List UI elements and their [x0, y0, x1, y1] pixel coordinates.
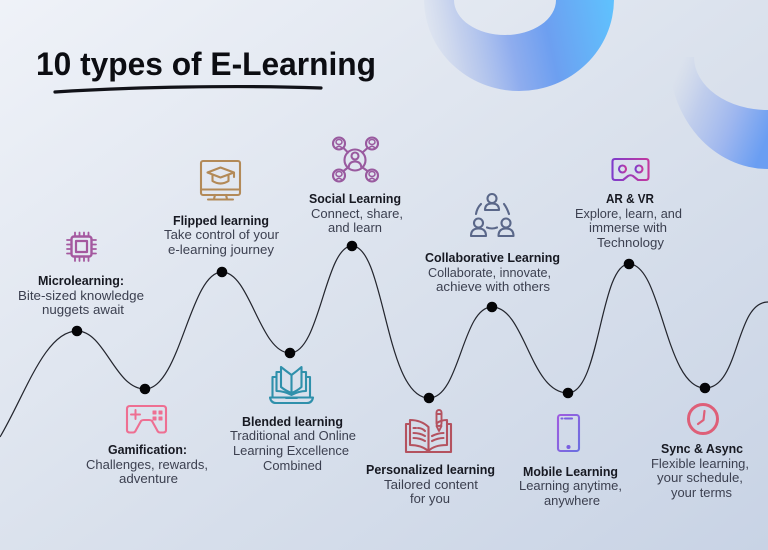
item: Sync & Async: your schedule,: [657, 471, 743, 485]
item: AR & VR: immerse with: [589, 221, 667, 235]
item: Social Learning: Connect, share,: [311, 207, 403, 221]
item: Microlearning: Bite-sized knowledge: [18, 289, 144, 303]
label: Social Learning: [309, 192, 401, 206]
label: Sync & Async: [661, 442, 743, 456]
item: Blended learning: Learning Excellence: [233, 444, 349, 458]
label: Blended learning: [242, 415, 343, 429]
decorative ring top centre: [424, 0, 614, 91]
timeline dots: [72, 241, 710, 403]
item: Mobile Learning: anywhere: [544, 494, 600, 508]
item: Gamification: adventure: [119, 472, 178, 486]
icon: open book on laptop: [270, 367, 313, 403]
item: Mobile Learning: Learning anytime,: [519, 479, 622, 493]
item: Flipped learning: Take control of your: [164, 228, 279, 242]
icon: gamepad: [127, 406, 166, 432]
item: Sync & Async: your terms: [671, 486, 732, 500]
icon: monitor with graduation cap: [201, 161, 240, 200]
decorative ring right: [669, 57, 768, 169]
label: Mobile Learning: [523, 465, 618, 479]
item: Blended learning: Combined: [263, 459, 322, 473]
item: Collaborative Learning: Collaborate, innovate,: [428, 266, 551, 280]
item: Social Learning: and learn: [328, 221, 382, 235]
item: Flipped learning: [164, 161, 279, 257]
item: Collaborative Learning: achieve with others: [436, 280, 550, 294]
icon: smartphone: [558, 415, 579, 451]
wavy timeline curve: [0, 246, 768, 437]
item: Flipped learning: e-learning journey: [168, 243, 275, 257]
item: Sync & Async: Flexible learning,: [651, 457, 749, 471]
label: Personalized learning: [366, 463, 495, 477]
item: Personalized learning: for you: [410, 492, 450, 506]
title underline: [55, 87, 321, 92]
item: Blended learning: Traditional and Online: [230, 429, 356, 443]
item: Social Learning: [309, 138, 403, 235]
item: Microlearning: [18, 232, 144, 317]
label: AR & VR: [606, 192, 654, 206]
item: AR & VR: Explore, learn, and: [575, 207, 682, 221]
item: AR & VR: [575, 159, 682, 250]
item: Personalized learning: Tailored content: [384, 478, 479, 492]
icon: three people collaborating: [471, 194, 514, 236]
label: Microlearning:: [38, 274, 124, 288]
label: Collaborative Learning: [425, 251, 560, 265]
label: Flipped learning: [173, 214, 269, 228]
label: Gamification:: [108, 443, 187, 457]
item: Personalized learning: [366, 410, 495, 506]
icon: clock: [688, 404, 718, 434]
item: Mobile Learning: [519, 415, 622, 508]
item: AR & VR: Technology: [597, 236, 665, 250]
icon: connected people network: [333, 138, 378, 182]
item: Collaborative Learning: [425, 194, 560, 294]
item: Gamification: Challenges, rewards,: [86, 458, 208, 472]
item: Gamification: [86, 406, 208, 486]
item: Microlearning: nuggets await: [42, 303, 125, 317]
item: Sync & Async: [651, 404, 749, 500]
icon: microchip: [67, 232, 96, 261]
title: 10 types of E-Learning: [36, 46, 376, 82]
icon: open book with pen: [406, 410, 451, 452]
item: Blended learning: [230, 367, 356, 473]
icon: VR headset: [612, 159, 648, 180]
